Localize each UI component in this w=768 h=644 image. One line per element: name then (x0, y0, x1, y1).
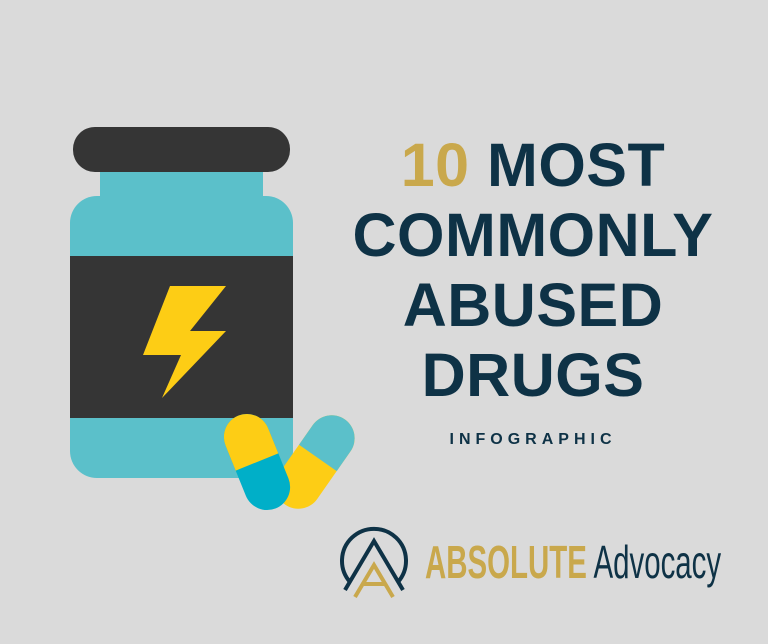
icon: lightning bolt (143, 286, 226, 398)
title: ABUSED (403, 271, 663, 339)
logo icon (342, 529, 406, 597)
title: 10 MOST (401, 131, 665, 199)
subtitle: INFOGRAPHIC (450, 431, 616, 448)
title (352, 131, 713, 409)
title: DRUGS (422, 341, 644, 409)
icon: capsule teal/yellow (266, 406, 364, 518)
icon: capsule yellow/blue (217, 407, 297, 517)
bottle (70, 127, 293, 478)
logo text: ABSOLUTE Advocacy (425, 536, 721, 588)
title: COMMONLY (352, 201, 713, 269)
